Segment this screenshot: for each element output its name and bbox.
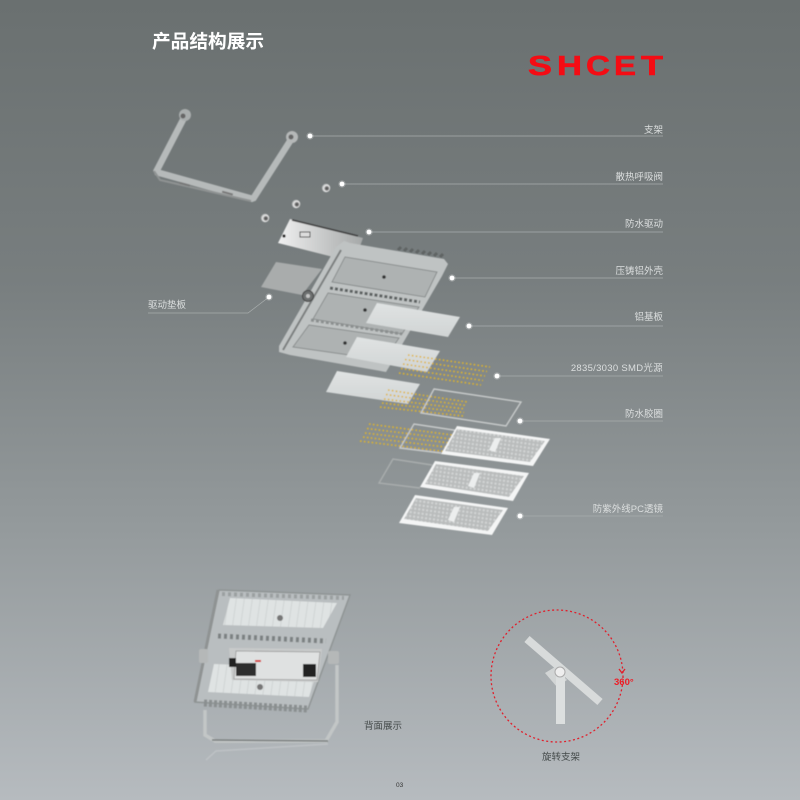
part: PC lens 3	[399, 495, 508, 535]
callout labels: 铝基板	[634, 311, 663, 323]
logo: SHCET: H	[557, 50, 582, 81]
callout labels: 防水胶圈	[625, 408, 663, 420]
part: SMD light sources	[360, 355, 490, 452]
callout labels: 支架	[644, 124, 663, 136]
part: bracket	[154, 109, 298, 201]
part: driver pad	[261, 262, 322, 295]
360 label: 360°	[614, 677, 634, 688]
rotating bracket diagram	[491, 610, 634, 742]
arm	[527, 639, 600, 702]
dashed rotation circle	[491, 610, 623, 742]
callout labels: 防紫外线PC透镜	[593, 503, 663, 515]
callout labels: 2835/3030 SMD光源	[571, 362, 663, 374]
plate	[545, 667, 567, 687]
part: PC lens 1	[441, 426, 550, 466]
logo: SHCET: S	[528, 50, 552, 81]
page number: 03	[396, 782, 404, 789]
callout labels: 防水驱动	[625, 218, 663, 230]
exploded diagram	[154, 109, 550, 535]
logo: SHCET	[528, 50, 663, 81]
title: 产品结构展示	[152, 31, 264, 52]
part: PC lens 2	[420, 461, 529, 501]
part: breather valves	[261, 184, 330, 222]
back view product	[195, 590, 350, 760]
callout labels	[148, 124, 663, 515]
logo: SHCET: T	[641, 50, 663, 81]
part: aluminium boards	[326, 303, 460, 404]
callout labels: 压铸铝外壳	[615, 265, 663, 277]
callout labels: 驱动垫板	[148, 299, 186, 311]
logo: SHCET: C	[586, 50, 610, 81]
stem	[556, 676, 565, 724]
part: waterproof gaskets	[379, 389, 521, 488]
logo: SHCET: E	[614, 50, 636, 81]
part: die-cast aluminium housing	[279, 241, 448, 372]
callout lines and dots	[148, 134, 663, 518]
arrowhead	[619, 669, 625, 673]
callout labels: 散热呼吸阀	[615, 171, 663, 183]
rotating bracket caption: 旋转支架	[542, 751, 581, 763]
pivot	[555, 667, 565, 677]
part: driver	[278, 219, 363, 260]
back view caption: 背面展示	[364, 720, 402, 732]
